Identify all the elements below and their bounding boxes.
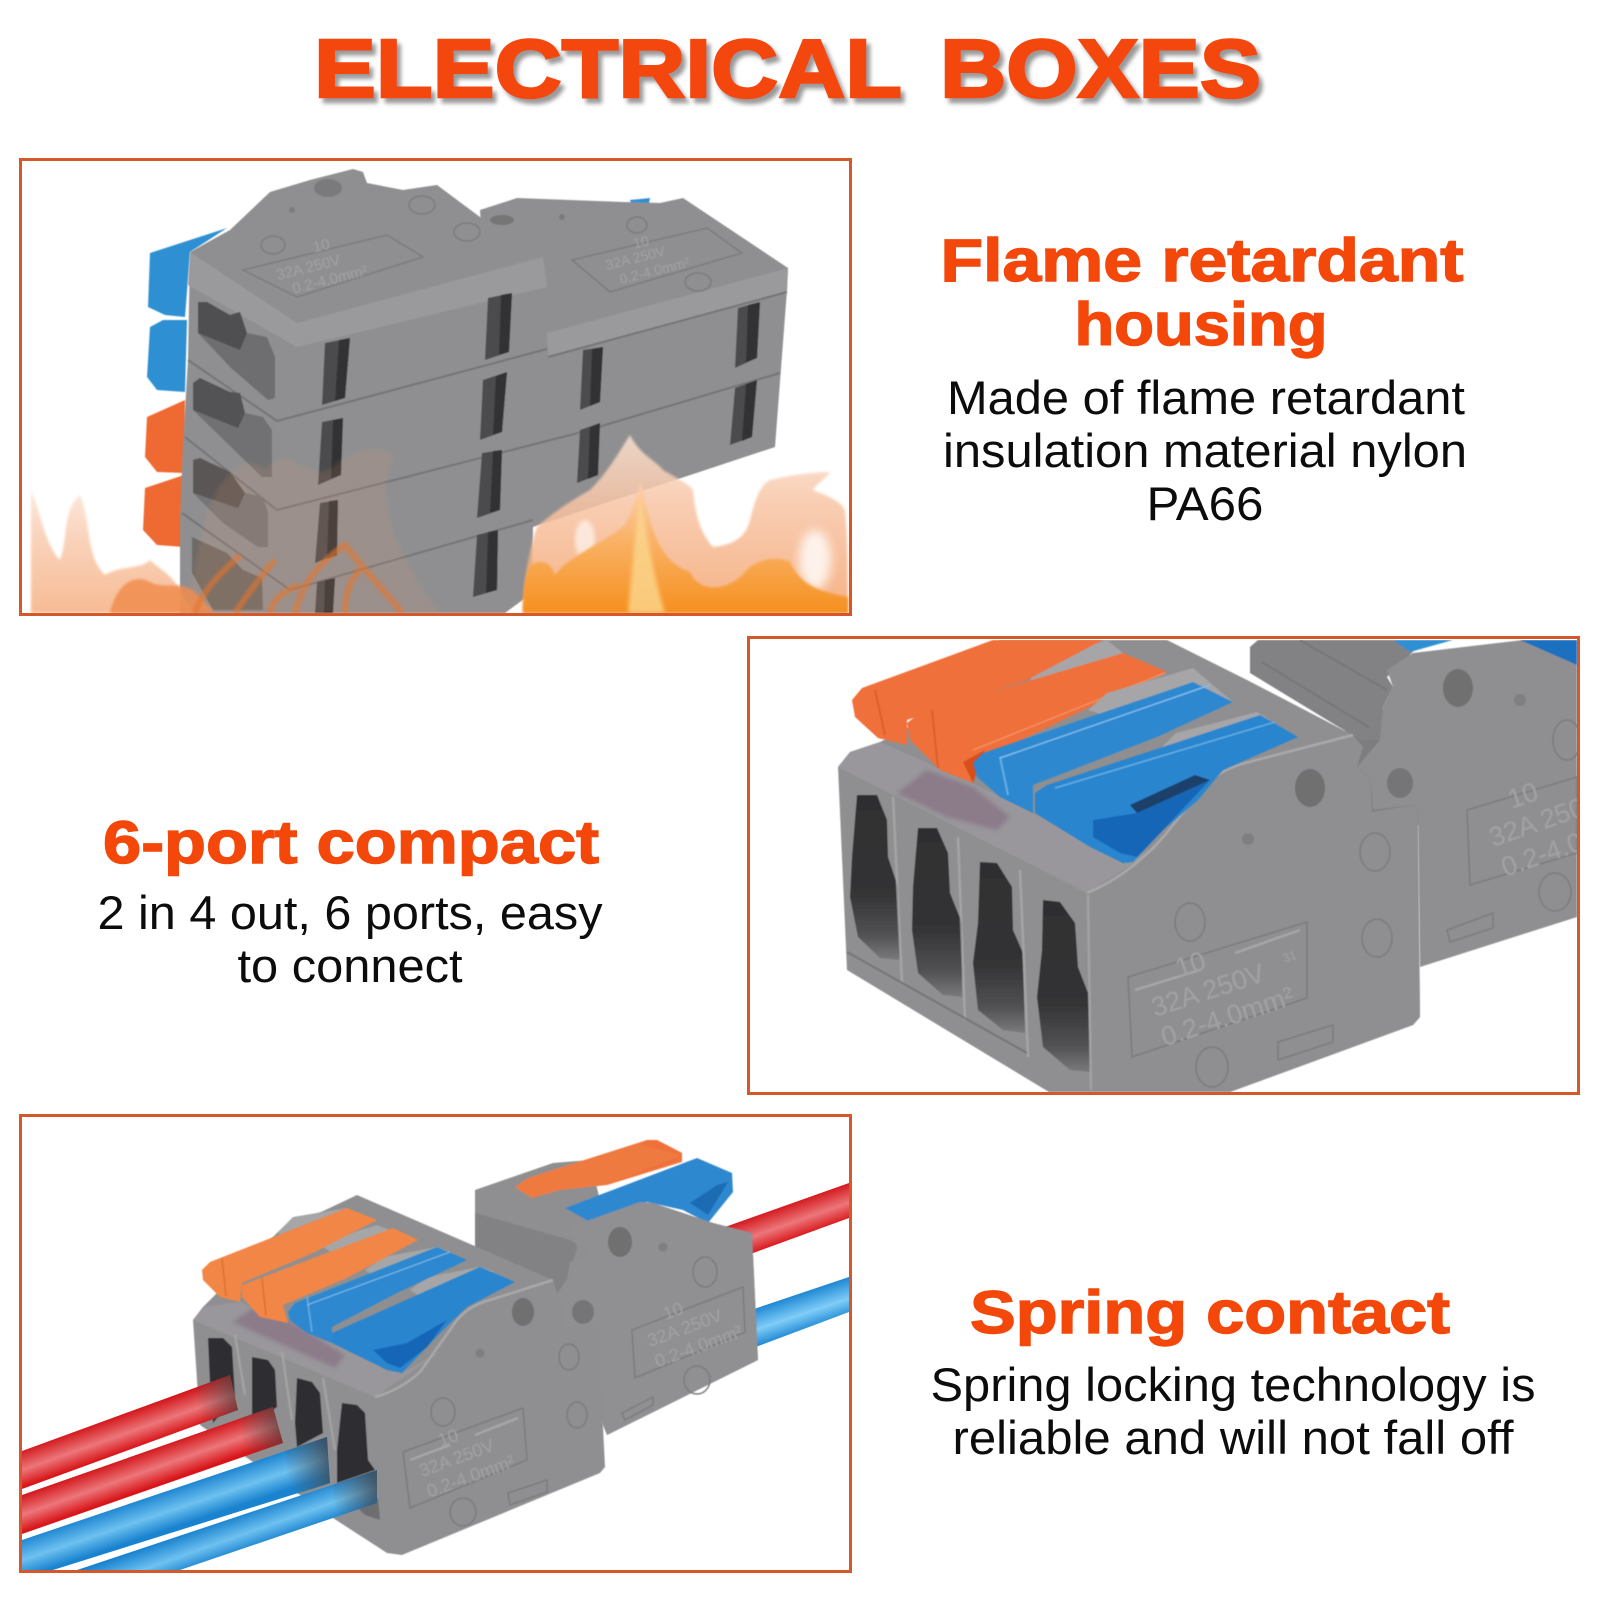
text: 6-port description: to connect [238,939,462,992]
label: rear rating mark: 10 [660,1298,686,1324]
text: flame retardant description: PA66 [1146,477,1264,530]
icon: wire port slots [208,1338,380,1520]
text: 6-port description: 2 in 4 out, 6 ports, easy [98,886,603,939]
panel: flame retardant housing photo [20,160,850,614]
icon: side levers [143,228,227,547]
text: flame retardant description: insulation material nylon [943,424,1467,477]
label: rear rating mark: 0.2-4.0mm² [618,254,691,287]
panel border [748,638,1578,1094]
icon: rear wires [725,1183,849,1351]
panel: spring contact photo [20,1116,850,1572]
label: front rating mark: 0.2-4.0mm² [1157,981,1298,1052]
icon: front wires [22,1375,377,1570]
title: BOXES [940,22,1261,115]
icon: rear connector stack [480,198,788,527]
label: front rating mark: 10 [435,1425,461,1451]
label: front rating mark: 0.2-4.0mm² [424,1451,517,1501]
text: spring contact description: reliable and will not fall off [952,1411,1514,1464]
icon: lever pivots [277,1208,495,1300]
label: rear rating mark: 32A 250V [645,1305,725,1351]
icon: rear connector [475,1140,758,1435]
heading: 6-port compact: 6-port compact [103,809,599,876]
icon: orange levers [202,1208,418,1323]
heading: housing: housing [1074,291,1328,358]
icon: rear connector [1250,640,1600,967]
icon: blue levers [288,1247,515,1373]
label: front rating mark: 31 [1281,948,1298,965]
panel border [20,1116,850,1572]
panel border [20,160,850,614]
label: rear rating mark: 10 [632,232,651,252]
heading: flame retardant: Flame retardant [940,227,1464,294]
text: flame retardant description: Made of flame retardant [947,371,1465,424]
label: front rating mark: 32A 250V [1148,958,1268,1023]
icon: front connector body [193,1195,605,1555]
label: front rating mark: 0.2-4.0mm² [291,262,369,297]
panel: compact connector photo [748,638,1600,1094]
title: ELECTRICAL [314,22,902,115]
icon: rectangular slots [315,293,512,613]
icon: wire port slots [850,795,1090,1072]
icon: flames [31,435,848,613]
label: rear rating mark: 32A 250V [604,243,667,273]
label: front rating mark: 10 [1172,946,1209,983]
label: rear rating mark: 0.2-4.0mm² [652,1321,745,1371]
icon: front connector body [838,640,1420,1092]
icon: side wire ports [192,302,275,610]
label: rear rating mark: 10 [1504,776,1542,815]
title [314,22,1261,115]
heading: spring contact: Spring contact [970,1279,1450,1346]
icon: front plate details [1128,769,1392,1087]
icon: front connector stack [180,169,578,613]
text: spring contact description: Spring locking technology is [930,1358,1536,1411]
icon: blue levers [973,668,1298,863]
label: front rating mark: 32A 250V [275,252,342,284]
icon: orange levers [852,640,1167,783]
icon: front plate details [403,1298,587,1526]
label: front rating mark: 32A 250V [417,1435,497,1481]
label: front rating mark: 10 [311,236,332,256]
